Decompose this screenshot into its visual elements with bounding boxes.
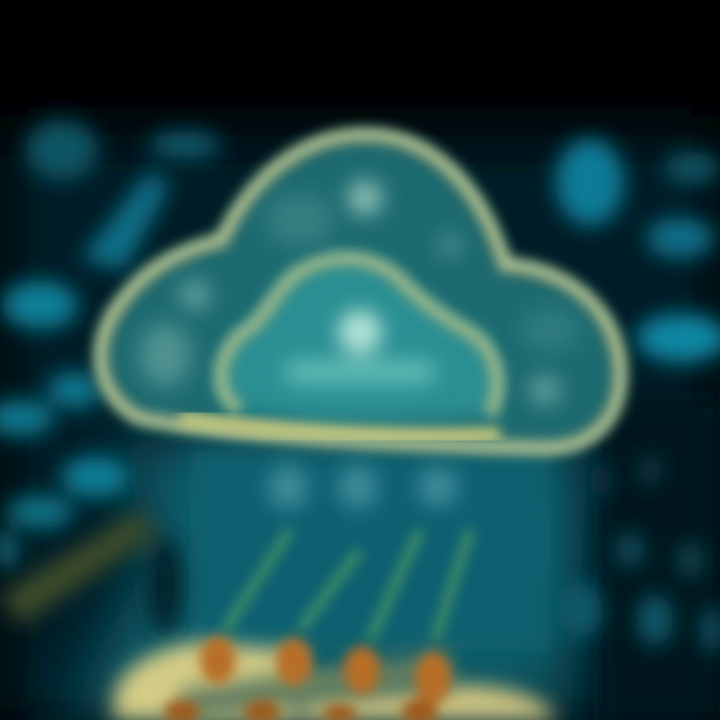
outer cloud fill [101,135,620,448]
left data blocks [0,120,221,570]
rain nodes [268,465,458,509]
left brown circuit strip [0,510,183,635]
lighter patches in outer cloud [139,194,580,387]
cloud sparkles [179,180,561,406]
base platform [113,642,555,720]
right data blocks [556,138,720,654]
outer cloud [101,135,620,448]
inner cloud fill [221,259,497,422]
inner cloud [180,259,500,435]
inner cloud outline [221,259,497,415]
orange pins [164,636,451,720]
green data lines [225,530,470,640]
outer cloud outline [101,135,620,448]
inner cloud base glow [180,418,500,435]
